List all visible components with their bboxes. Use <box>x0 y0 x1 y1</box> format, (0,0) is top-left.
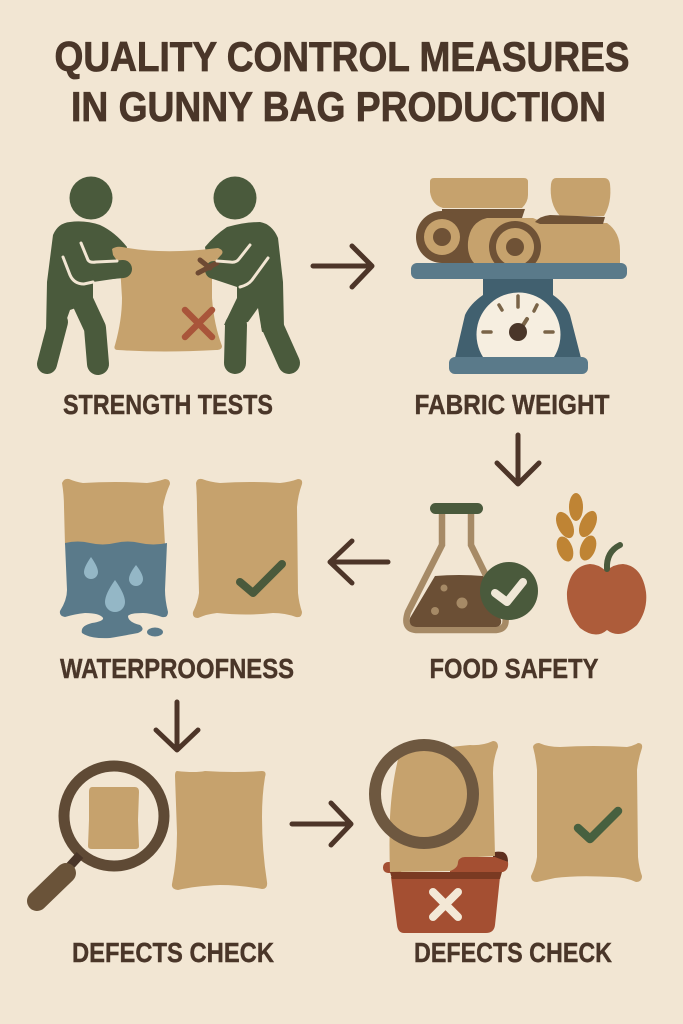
label: waterproofness: WATERPROOFNESS <box>60 653 294 684</box>
icon: magnifier with sample <box>37 766 164 901</box>
label: fabric weight: FABRIC WEIGHT <box>414 389 610 420</box>
label: defects check 2: DEFECTS CHECK <box>414 937 612 968</box>
icon: rejected bag in basket <box>375 741 508 933</box>
icon: approved bag <box>531 743 642 882</box>
icon: plain bag <box>172 771 267 890</box>
arrow: right 2 <box>292 803 351 845</box>
arrow: left <box>330 541 388 583</box>
icon: good bag with check <box>193 479 302 618</box>
title <box>54 33 630 130</box>
tear mark <box>185 310 212 337</box>
arrow: down 1 <box>497 435 539 484</box>
arrow: down 2 <box>156 702 198 750</box>
icon: grain and apple <box>552 493 646 635</box>
icon: flask with check <box>406 503 538 630</box>
label: food safety: FOOD SAFETY <box>430 653 599 684</box>
icon: two figures pulling a bag <box>46 176 289 364</box>
label: strength tests: STRENGTH TESTS <box>63 389 273 420</box>
arrow: right 1 <box>313 246 372 287</box>
title: IN GUNNY BAG PRODUCTION <box>71 83 606 130</box>
sack being pulled <box>112 247 222 352</box>
label: defects check 1: DEFECTS CHECK <box>72 937 274 968</box>
icon: wet bag <box>60 479 170 638</box>
icon: fabric rolls on scale <box>411 178 627 374</box>
